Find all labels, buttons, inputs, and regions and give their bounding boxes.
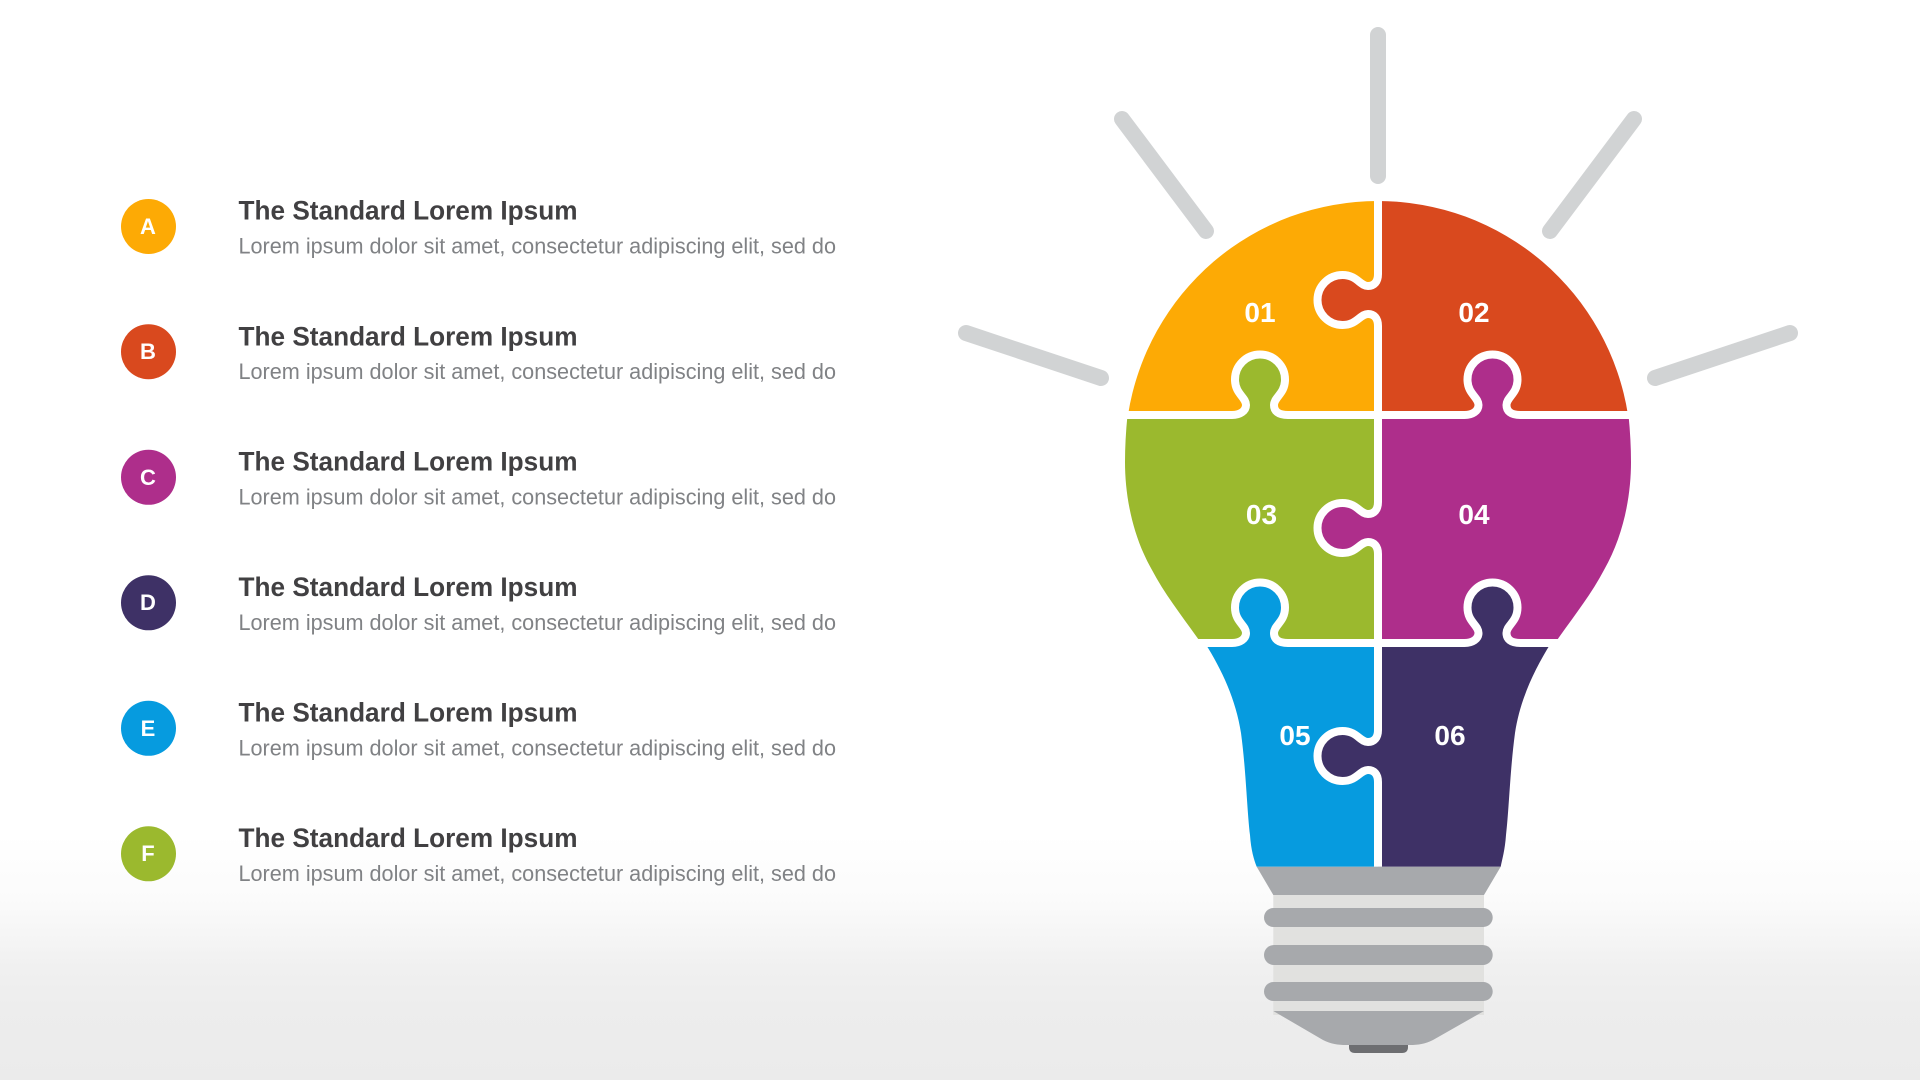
- item F: Lorem ipsum dolor sit amet, consectetur adipiscing elit, sed do: [238, 861, 836, 886]
- puzzle piece 03: [1125, 354, 1378, 643]
- light bulb: [1120, 195, 1636, 1053]
- puzzle piece 01: [1128, 201, 1378, 415]
- item A: A: [140, 214, 156, 239]
- item F: The Standard Lorem Ipsum: [238, 823, 578, 853]
- list of items A to F: [121, 196, 836, 886]
- item C: C: [140, 465, 156, 490]
- item F: [121, 823, 836, 886]
- piece numbers: 01: [1244, 297, 1276, 328]
- piece numbers: 03: [1246, 499, 1277, 530]
- piece numbers: 02: [1458, 297, 1490, 328]
- item B: B: [140, 339, 156, 364]
- puzzle piece 04: [1317, 354, 1631, 643]
- piece numbers: 06: [1434, 720, 1466, 751]
- item A: Lorem ipsum dolor sit amet, consectetur adipiscing elit, sed do: [238, 234, 836, 258]
- item A: The Standard Lorem Ipsum: [238, 196, 578, 226]
- item D: The Standard Lorem Ipsum: [238, 572, 578, 602]
- item B: Lorem ipsum dolor sit amet, consectetur adipiscing elit, sed do: [238, 359, 836, 384]
- item E: [121, 698, 836, 760]
- item B: [121, 321, 836, 384]
- piece numbers: [1244, 297, 1490, 751]
- item B: The Standard Lorem Ipsum: [238, 321, 578, 351]
- item F: F: [141, 841, 155, 866]
- item C: [121, 447, 836, 510]
- item E: E: [141, 716, 155, 741]
- item D: D: [140, 590, 156, 615]
- puzzle piece 05: [1205, 582, 1378, 867]
- piece numbers: 05: [1279, 720, 1311, 751]
- item A: [121, 196, 836, 258]
- piece numbers: 04: [1458, 499, 1490, 530]
- bulb screw base: [1257, 867, 1501, 1053]
- item E: Lorem ipsum dolor sit amet, consectetur adipiscing elit, sed do: [238, 736, 836, 760]
- light rays: [966, 35, 1790, 378]
- item D: Lorem ipsum dolor sit amet, consectetur adipiscing elit, sed do: [238, 610, 836, 635]
- white puzzle seams: [1120, 195, 1636, 867]
- item C: The Standard Lorem Ipsum: [238, 447, 578, 477]
- puzzle piece 02: [1317, 201, 1628, 415]
- puzzle piece 06: [1317, 582, 1551, 867]
- item D: [121, 572, 836, 635]
- item C: Lorem ipsum dolor sit amet, consectetur adipiscing elit, sed do: [238, 484, 836, 510]
- item E: The Standard Lorem Ipsum: [238, 698, 578, 728]
